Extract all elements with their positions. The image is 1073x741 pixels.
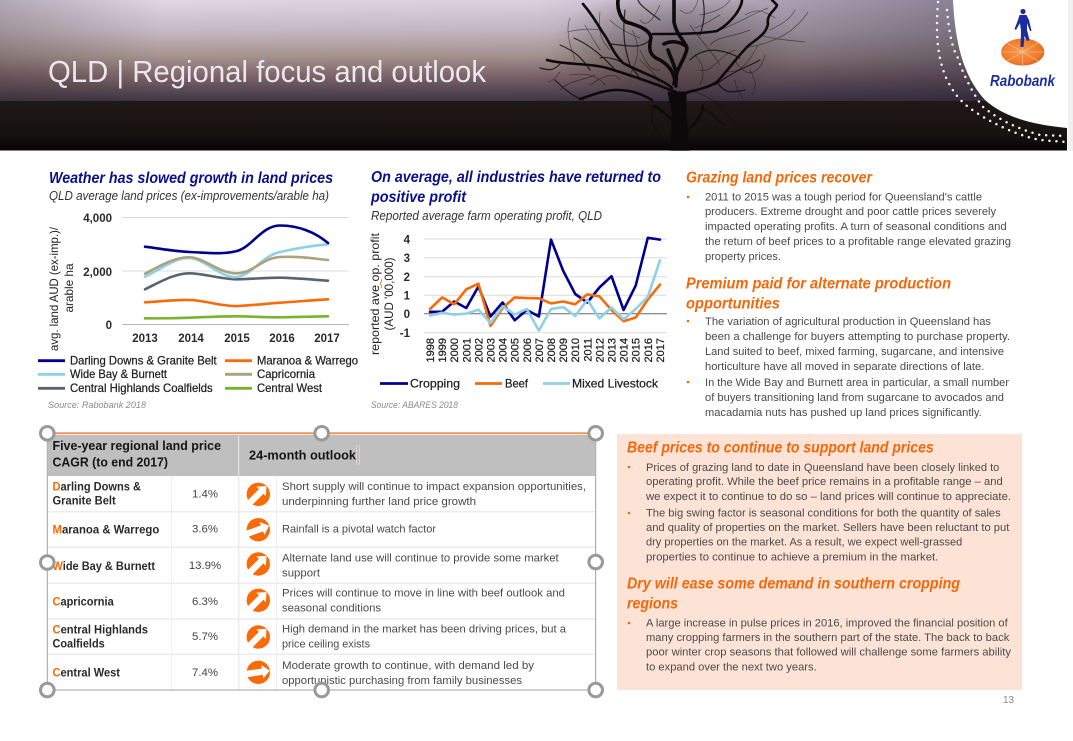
logo wordmark: Rabobank xyxy=(990,73,1056,90)
row: Central Highlands: Coalfields xyxy=(52,637,105,651)
line chart: farm profit: 1999 xyxy=(437,338,449,362)
row: Darling Downs: underpinning further land price growth xyxy=(282,496,476,508)
row: Maranoa: Maranoa & Warrego xyxy=(52,522,159,536)
line chart: land prices: 0 xyxy=(106,320,112,332)
row: Central West: opportunistic purchasing from family businesses xyxy=(282,675,522,687)
text block: premium paid: horticulture have all moved in separate directions of late. xyxy=(705,361,984,373)
row: Central West xyxy=(52,660,534,687)
heading: grazing land: Grazing land prices recover xyxy=(686,170,873,187)
line chart: farm profit: 2009 xyxy=(558,338,570,362)
icon: arrow up-right xyxy=(245,481,271,507)
subheading: Reported average farm operating profit, QLD xyxy=(371,209,602,223)
line chart: farm profit: 2008 xyxy=(546,338,558,362)
dotted curve on banner xyxy=(937,2,1067,142)
line chart: farm profit: 0 xyxy=(404,309,410,321)
row: Darling Downs: Short supply will continue to impact expansion opportunities, xyxy=(282,481,586,493)
line chart: farm profit: 2001 xyxy=(461,338,473,362)
line chart: farm profit: 2015 xyxy=(631,338,643,362)
text block: premium paid: of buyers transitioning land from sugarcane to avocados and xyxy=(705,392,1004,404)
row: Maranoa: 3.6% xyxy=(192,524,218,536)
line chart: farm profit: (AUD '00,000) xyxy=(382,257,396,330)
icon: arrow slight up xyxy=(246,661,271,684)
text block: grazing land xyxy=(687,192,1011,263)
text block: beef prices: operating profit. While the beef price remains in a profitable range – and xyxy=(646,476,1003,488)
row: Central Highlands: price ceiling exists xyxy=(282,638,370,650)
heading: premium paid: Premium paid for alternate production xyxy=(686,275,951,292)
panel: land prices chart xyxy=(38,170,358,411)
line chart: land prices: avg. land AUD (ex-imp.)/ xyxy=(47,226,61,351)
heading: On average, all industries have returned to xyxy=(371,169,661,186)
legend: land prices: Central West xyxy=(257,381,323,395)
text block: dry xyxy=(628,618,1011,674)
table header: 24-month outlook xyxy=(249,448,356,462)
table header xyxy=(48,435,595,476)
text block: grazing land: the return of beef prices to a profitable range elevated grazing xyxy=(705,236,1011,248)
legend: land prices: Capricornia xyxy=(257,367,315,381)
line chart: land prices: arable ha xyxy=(62,263,76,312)
panel: right commentary xyxy=(686,170,1011,419)
line chart: farm profit: 2010 xyxy=(570,338,582,362)
logo panel: white curve xyxy=(953,0,1067,128)
line chart: farm profit: -1 xyxy=(400,328,411,340)
text block: beef prices: and quality of properties on the market. Sellers have been reluctant to put xyxy=(646,522,1010,534)
row: Central West: Central West xyxy=(52,666,120,680)
table header: CAGR (to end 2017) xyxy=(52,456,168,470)
line chart: land prices: 4,000 xyxy=(83,213,112,225)
line chart: farm profit: 2000 xyxy=(449,338,461,362)
text block: premium paid: been a challenge for buyers attempting to purchase property. xyxy=(705,331,1010,343)
source note: Source: Rabobank 2018 xyxy=(48,400,147,411)
text block: premium paid xyxy=(687,316,1010,419)
legend: farm profit: Mixed Livestock xyxy=(572,377,659,391)
heading: Weather has slowed growth in land prices xyxy=(49,170,333,187)
row: Darling Downs: Granite Belt xyxy=(52,494,116,508)
text block: beef prices: Prices of grazing land to date in Queensland have been closely linked to xyxy=(646,462,999,474)
text block: grazing land: 2011 to 2015 was a tough period for Queensland's cattle xyxy=(705,192,982,204)
line chart: farm profit: 2007 xyxy=(534,338,546,362)
row: Central West: 7.4% xyxy=(192,667,218,679)
subheading: QLD average land prices (ex-improvements/arable ha) xyxy=(49,189,329,203)
row: Central Highlands xyxy=(52,622,567,651)
panel: outlook callout xyxy=(617,434,1022,690)
heading: dry: regions xyxy=(627,595,678,612)
text block: beef prices: properties to continue to achieve a premium in the market. xyxy=(646,552,938,564)
line chart: farm profit xyxy=(368,232,667,362)
line chart: land prices: 2014 xyxy=(178,333,204,345)
heading: beef prices: Beef prices to continue to support land prices xyxy=(627,439,934,456)
source note: Source: ABARES 2018 xyxy=(371,400,459,411)
heading: positive profit xyxy=(370,189,467,206)
line chart: farm profit: 4 xyxy=(404,234,411,246)
row: Central Highlands: 5.7% xyxy=(192,631,218,643)
text block: beef prices: dry properties on the market. As a result, we expect well-grassed xyxy=(646,537,962,549)
text block: premium paid: Land suited to beef, mixed farming, sugarcane, and intensive xyxy=(705,346,1004,358)
row: Central Highlands: Central Highlands xyxy=(52,622,148,636)
row: Darling Downs: 1.4% xyxy=(192,489,218,501)
legend: farm profit: Beef xyxy=(505,377,529,391)
legend: land prices: Darling Downs & Granite Belt xyxy=(70,354,217,368)
row: Darling Downs: Darling Downs & xyxy=(52,480,141,494)
table header: Five-year regional land price xyxy=(52,439,221,453)
legend: land prices: Maranoa & Warrego xyxy=(257,354,358,368)
line chart: farm profit: 2017 xyxy=(655,338,667,362)
line chart: farm profit: 2011 xyxy=(582,338,594,362)
line chart: farm profit: 2 xyxy=(404,272,410,284)
panel: farm profit chart xyxy=(368,169,667,411)
row: Wide Bay: 13.9% xyxy=(189,560,221,572)
line chart: land prices: 2017 xyxy=(314,333,340,345)
line chart: farm profit: 2013 xyxy=(606,338,618,362)
line chart: farm profit: 2003 xyxy=(486,338,498,362)
text block: dry: to expand over the next two years. xyxy=(646,662,817,674)
row: Central Highlands: High demand in the market has been driving prices, but a xyxy=(282,623,567,635)
line chart: farm profit: 2002 xyxy=(473,338,485,362)
row: Central West: Moderate growth to continue, with demand led by xyxy=(282,660,534,672)
line chart: farm profit: 3 xyxy=(404,253,410,265)
heading: premium paid: opportunities xyxy=(686,295,780,312)
legend: land prices: Wide Bay & Burnett xyxy=(70,367,168,381)
icon: arrow up-right xyxy=(245,587,271,613)
line chart: farm profit: 2006 xyxy=(522,338,534,362)
legend: land prices xyxy=(38,354,358,395)
icon: arrow up-right xyxy=(245,624,271,650)
header photo banner xyxy=(0,0,1073,151)
line chart: farm profit: 2016 xyxy=(643,338,655,362)
icon: orange globe disc xyxy=(1001,38,1044,66)
title: QLD | Regional focus and outlook xyxy=(48,54,486,89)
text block: premium paid: In the Wide Bay and Burnett area in particular, a small number xyxy=(705,377,1009,389)
line chart: farm profit: 2014 xyxy=(619,338,631,362)
row: Wide Bay: support xyxy=(282,568,321,580)
row: Wide Bay: Alternate land use will continue to provide some market xyxy=(282,553,560,565)
line chart: farm profit: 1998 xyxy=(425,338,437,362)
text block: grazing land: impacted operating profits. A turn of seasonal conditions and xyxy=(705,221,1007,233)
row: Wide Bay: Wide Bay & Burnett xyxy=(52,559,155,573)
line chart: farm profit: reported ave op. profit xyxy=(368,232,382,355)
logo: Rabobank xyxy=(990,9,1056,90)
row: Wide Bay xyxy=(52,551,560,580)
legend: farm profit: Cropping xyxy=(410,377,460,391)
icon: walking figure xyxy=(1014,9,1032,47)
text block: premium paid: macadamia nuts has pushed up land prices significantly. xyxy=(705,407,982,419)
row: Capricornia: Capricornia xyxy=(52,595,114,609)
line chart: farm profit: 2012 xyxy=(594,338,606,362)
selection frame with handles xyxy=(40,426,602,697)
panel: regional table xyxy=(40,426,602,697)
line chart: farm profit: 1 xyxy=(404,290,411,302)
heading: dry: Dry will ease some demand in southern cropping xyxy=(627,575,960,592)
text block: beef prices: The big swing factor is seasonal conditions for both the quantity of sales xyxy=(646,508,1001,520)
legend: farm profit xyxy=(380,377,659,391)
row: Capricornia: 6.3% xyxy=(192,596,218,608)
text block: premium paid: The variation of agricultural production in Queensland has xyxy=(705,316,991,328)
line chart: farm profit: 2004 xyxy=(498,338,510,362)
text block: beef prices xyxy=(628,462,1011,564)
text block: dry: many cropping farmers in the southern part of the state. The back to back xyxy=(646,632,1010,644)
line chart: farm profit: 2005 xyxy=(510,338,522,362)
row: Darling Downs xyxy=(52,480,586,508)
row: Capricornia: seasonal conditions xyxy=(282,603,381,615)
text block: beef prices: we expect it to continue to do so – land prices will continue to appreciate. xyxy=(645,491,1011,503)
row: Maranoa: Rainfall is a pivotal watch factor xyxy=(282,524,436,536)
line chart: land prices: 2013 xyxy=(132,333,158,345)
icon: arrow slight up xyxy=(245,518,271,541)
text block: dry: poor winter crop seasons that followed will challenge some farmers ability xyxy=(646,647,1011,659)
row: Maranoa xyxy=(52,518,436,541)
line chart: land prices: 2016 xyxy=(269,333,295,345)
row: Capricornia: Prices will continue to move in line with beef outlook and xyxy=(282,588,565,600)
text block: grazing land: property prices. xyxy=(705,251,781,263)
text block: grazing land: producers. Extreme drought and poor cattle prices severely xyxy=(705,206,996,218)
page number: 13 xyxy=(1003,695,1015,706)
icon: arrow up-right xyxy=(245,551,271,577)
icon: bare tree silhouette xyxy=(540,0,808,150)
line chart: land prices: 2,000 xyxy=(83,267,112,279)
line chart: land prices xyxy=(47,213,349,351)
line chart: land prices: 2015 xyxy=(224,333,250,345)
text block: dry: A large increase in pulse prices in 2016, improved the financial position of xyxy=(646,618,1009,630)
legend: land prices: Central Highlands Coalfields xyxy=(70,381,213,395)
row: Capricornia xyxy=(52,587,565,615)
